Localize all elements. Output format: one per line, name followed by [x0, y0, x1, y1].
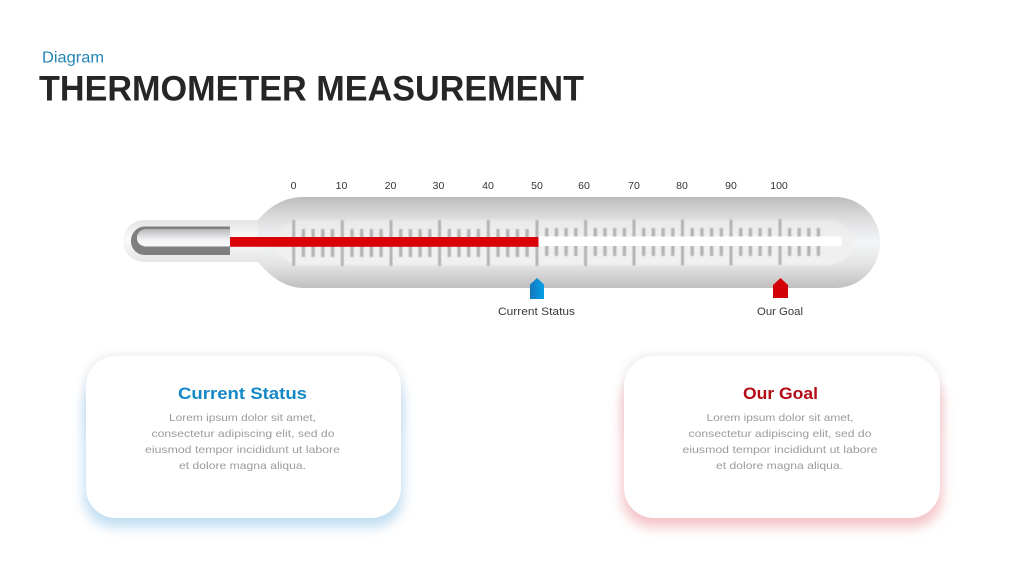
red mercury column	[230, 237, 538, 247]
card body text: Lorem ipsum dolor sit amet,	[706, 412, 854, 424]
icon: red arrow marker	[773, 278, 788, 298]
title: THERMOMETER MEASUREMENT	[39, 70, 584, 109]
panel: current status	[84, 353, 403, 527]
card	[624, 356, 940, 518]
thermometer body	[258, 197, 880, 288]
scale numbers: 60	[578, 180, 590, 192]
card top halo	[84, 353, 403, 453]
scale numbers: 100	[770, 180, 788, 192]
scale numbers: 40	[482, 180, 494, 192]
card body text: et dolore magna aliqua.	[179, 460, 306, 472]
card heading: Our Goal	[743, 385, 818, 403]
icon: blue arrow marker	[530, 278, 544, 299]
card body text: consectetur adipiscing elit, sed do	[152, 428, 335, 440]
scale numbers: 90	[725, 180, 737, 192]
card body text: Lorem ipsum dolor sit amet,	[169, 412, 316, 424]
card body text	[682, 412, 878, 472]
scale numbers: 10	[336, 180, 347, 192]
white mercury channel	[538, 236, 842, 246]
scale numbers: 0	[291, 180, 297, 192]
marker label: Our Goal	[757, 306, 803, 318]
panel: our goal	[622, 353, 942, 527]
thermometer	[123, 197, 880, 288]
scale numbers: 80	[676, 180, 688, 192]
marker label: Current Status	[498, 306, 576, 318]
card top halo	[622, 353, 942, 453]
bulb capsule	[131, 226, 230, 255]
card heading: Current Status	[178, 385, 307, 403]
scale ticks	[294, 219, 818, 266]
scale numbers: 30	[433, 180, 444, 192]
inner window	[268, 220, 853, 265]
card body text: consectetur adipiscing elit, sed do	[688, 428, 872, 440]
scale numbers	[291, 180, 788, 192]
scale numbers: 50	[531, 180, 543, 192]
card	[86, 356, 401, 518]
scale numbers: 70	[628, 180, 640, 192]
card body text: et dolore magna aliqua.	[716, 460, 843, 472]
capsule dark outline	[131, 226, 230, 255]
marker: our goal	[757, 278, 803, 318]
card body text: eiusmod tempor incididunt ut labore	[682, 444, 878, 456]
capsule glass	[137, 229, 230, 246]
card body text: eiusmod tempor incididunt ut labore	[145, 444, 340, 456]
subtitle: Diagram: Diagram	[42, 50, 104, 66]
marker: current status	[498, 278, 576, 318]
card shadow	[84, 372, 403, 527]
thermometer neck and bulb	[123, 220, 293, 262]
card body text	[145, 412, 340, 472]
scale numbers: 20	[385, 180, 396, 192]
card shadow	[622, 372, 942, 527]
